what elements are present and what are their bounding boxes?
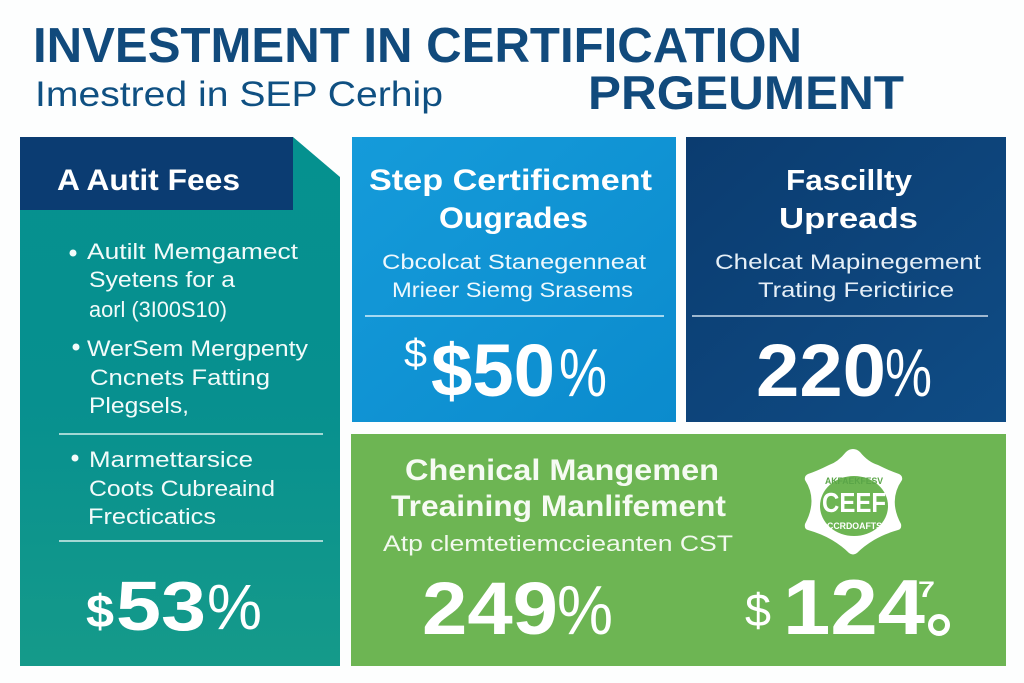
bullet list item 1: Autilt Memgamect — [87, 239, 298, 264]
panel description: Cbcolcat Stanegenneat — [382, 251, 646, 274]
icon: certification badge: CEEF — [822, 487, 886, 518]
bullet list item 2 — [72, 336, 308, 418]
icon: certification badge: CCRDOAFTS — [827, 521, 882, 531]
panel heading — [369, 164, 652, 235]
panel heading — [391, 454, 726, 523]
title: INVESTMENT IN CERTIFICATION — [33, 19, 802, 73]
panel header: audit fees — [20, 137, 293, 210]
stat: training cost — [745, 563, 948, 651]
stat: training cost: 7 — [918, 577, 935, 602]
bullet list item 2: WerSem Mergpenty — [87, 336, 308, 361]
bullet list item 3: Marmettarsice — [89, 447, 253, 472]
panel description: Chelcat Mapinegement — [715, 251, 981, 274]
stat: training cost: 124 — [783, 563, 925, 651]
stat: upgrades — [404, 329, 607, 412]
stat: upgrades: % — [559, 335, 607, 411]
stat: upgrades: $50 — [431, 329, 555, 412]
panel: step certificate upgrades — [352, 137, 676, 422]
panel description — [382, 251, 646, 302]
stat: facility: % — [885, 335, 932, 411]
panel heading — [779, 165, 918, 235]
title second part: PRGEUMENT — [588, 66, 904, 119]
bullet list item 1: aorl (3I00S10) — [89, 297, 227, 322]
subtitle: Imestred in SEP Cerhip — [35, 75, 443, 114]
panel: chemical management training — [351, 434, 1006, 666]
bullet list item 2: Plegsels, — [89, 393, 189, 418]
stat: upgrades: $ — [404, 332, 427, 376]
stat: training cost: $ — [745, 584, 771, 636]
panel: audit fees — [20, 137, 340, 666]
icon: certification badge — [805, 449, 902, 554]
stat: audit fees: 53 — [116, 567, 206, 645]
panel description: Atp clemtetiemccieanten CST — [383, 531, 733, 556]
panel heading: Upreads — [779, 203, 918, 235]
panel header: audit fees: A Autit Fees — [57, 164, 240, 197]
bullet list item 3 — [72, 447, 275, 529]
panel heading: Fascillty — [786, 165, 912, 197]
bullet list item 3: Coots Cubreaind — [89, 476, 275, 501]
stat: audit fees: $ — [86, 585, 114, 637]
stat: audit fees: % — [207, 571, 262, 643]
panel heading: Treaining Manlifement — [391, 490, 726, 523]
panel description — [715, 251, 981, 302]
stat: training percent — [422, 567, 613, 650]
stat: audit fees — [86, 567, 262, 645]
panel description: Trating Ferictirice — [758, 279, 954, 302]
icon: certification badge: AKFAEKFESV — [825, 476, 884, 487]
bullet list item 1: Syetens for a — [89, 267, 236, 292]
panel heading: Chenical Mangemen — [405, 454, 719, 487]
panel heading: Step Certificment — [369, 164, 652, 197]
bullet list item 2: Cncnets Fatting — [90, 365, 270, 390]
bullet list item 1 — [70, 239, 298, 322]
panel description: Mrieer Siemg Srasems — [392, 279, 633, 302]
bullet list item 3: Frecticatics — [88, 504, 216, 529]
stat: training percent: 249 — [422, 567, 558, 650]
stat: facility: 220 — [756, 329, 886, 412]
panel: facility upgrades — [686, 137, 1006, 422]
panel heading: Ougrades — [439, 202, 588, 235]
stat: training percent: % — [557, 571, 613, 649]
